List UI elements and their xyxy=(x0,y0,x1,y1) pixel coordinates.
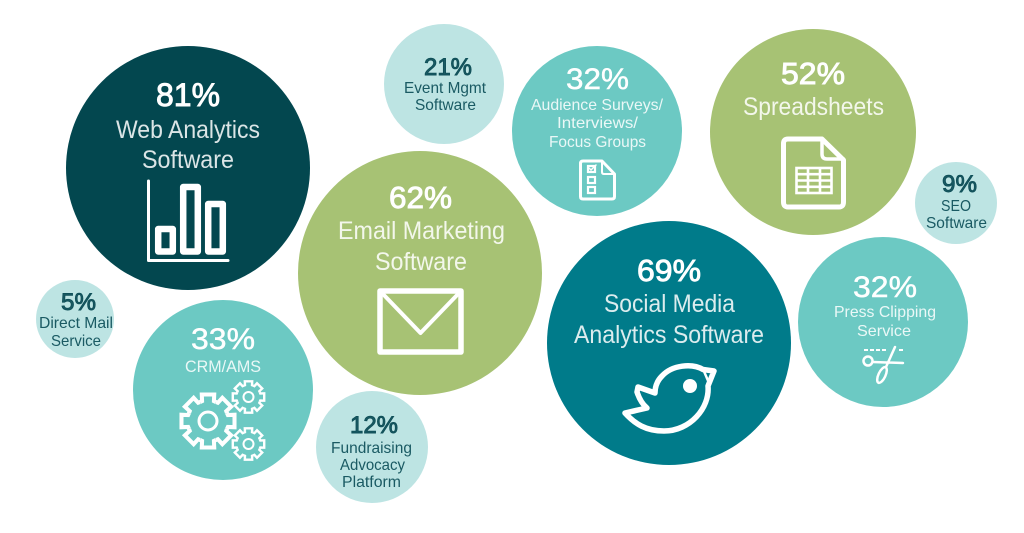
panel: 12% fundraising advocacy platform xyxy=(316,391,428,503)
panel: 9% SEO software xyxy=(915,162,997,244)
icon: gears xyxy=(181,381,264,460)
percentage: 69% xyxy=(637,253,701,288)
panel: 5% direct mail service xyxy=(36,280,114,358)
panel: 21% event management software xyxy=(384,24,504,144)
circle xyxy=(710,29,916,235)
percentage: 52% xyxy=(781,56,845,91)
circle xyxy=(36,280,114,358)
icon: bar chart xyxy=(148,181,228,260)
percentage: 12% xyxy=(350,412,398,439)
label: Software xyxy=(375,248,467,276)
icon: scissors xyxy=(864,347,905,384)
panel: 32% audience surveys xyxy=(512,46,682,216)
icon: spreadsheet document xyxy=(784,139,844,207)
label: Audience Surveys/ xyxy=(531,97,664,114)
label: Platform xyxy=(342,474,401,491)
label: CRM/AMS xyxy=(185,357,261,376)
circle xyxy=(512,46,682,216)
percentage: 32% xyxy=(566,63,629,96)
label: Software xyxy=(142,146,234,174)
percentage: 62% xyxy=(389,180,452,215)
label xyxy=(116,116,260,174)
label xyxy=(574,290,764,349)
icon: envelope xyxy=(380,291,461,352)
label xyxy=(331,440,412,491)
panel: 81% web analytics software xyxy=(66,46,310,290)
label: Software xyxy=(926,215,987,232)
panel: 33% CRM/AMS xyxy=(133,300,313,480)
label: Service xyxy=(857,323,911,340)
circle xyxy=(316,391,428,503)
circle xyxy=(66,46,310,290)
circle xyxy=(298,151,542,395)
label: Event Mgmt xyxy=(404,80,487,97)
circle xyxy=(384,24,504,144)
circle xyxy=(547,221,791,465)
label xyxy=(39,315,113,350)
label xyxy=(834,304,936,340)
label: Press Clipping xyxy=(834,304,936,321)
percentage: 33% xyxy=(191,323,255,356)
label: Direct Mail xyxy=(39,315,113,332)
percentage: 5% xyxy=(61,289,96,316)
percentage: 21% xyxy=(424,54,472,81)
circle xyxy=(915,162,997,244)
panel: 52% spreadsheets xyxy=(710,29,916,235)
label: Software xyxy=(415,97,476,114)
label: Focus Groups xyxy=(549,134,646,151)
percentage: 9% xyxy=(942,171,977,198)
percentage: 81% xyxy=(156,77,220,113)
label: Spreadsheets xyxy=(743,93,884,121)
label: Analytics Software xyxy=(574,321,764,349)
percentage: 32% xyxy=(853,271,917,304)
label: Email Marketing xyxy=(338,217,505,245)
label: Web Analytics xyxy=(116,116,260,144)
label xyxy=(404,80,487,114)
circle xyxy=(133,300,313,480)
label: Advocacy xyxy=(340,457,405,474)
label: Fundraising xyxy=(331,440,412,457)
icon: checklist document xyxy=(580,161,614,199)
label xyxy=(926,198,987,232)
circle xyxy=(798,237,968,407)
label: SEO xyxy=(941,198,971,215)
label: Service xyxy=(51,333,101,350)
panel: 62% email marketing software xyxy=(298,151,542,395)
label: Interviews/ xyxy=(557,115,639,132)
icon: bird xyxy=(625,366,714,431)
panel: 69% social media analytics software xyxy=(547,221,791,465)
label xyxy=(531,97,664,151)
label xyxy=(338,217,505,276)
label: Social Media xyxy=(604,290,735,318)
panel: 32% press clipping service xyxy=(798,237,968,407)
